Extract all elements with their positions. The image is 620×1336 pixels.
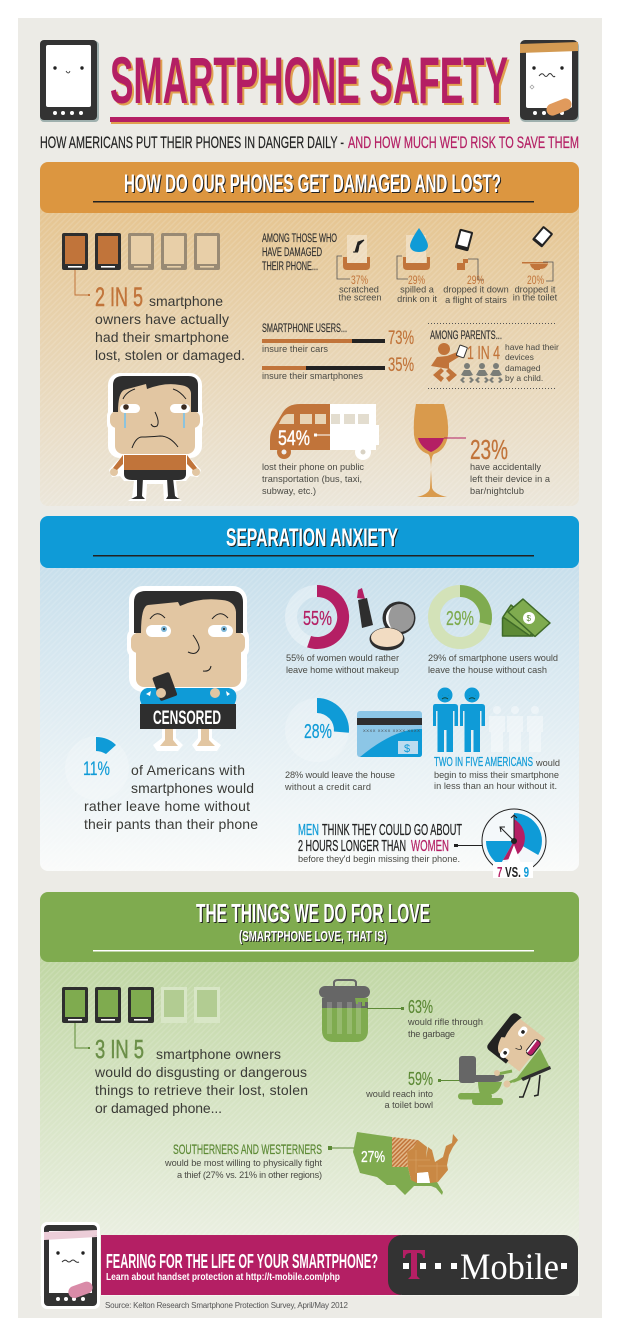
text: pants: of Americans with: [131, 762, 245, 778]
stat: dropped in the toilet: in the toilet: [513, 292, 558, 302]
text: two in five americans: TWO IN FIVE AMERICANS: [434, 755, 533, 769]
clock chart: 7 vs 9: 7 VS. 9: [497, 864, 529, 881]
icon: wine glass 23%: [414, 404, 508, 497]
icon: footer bandaged phone: [41, 1222, 100, 1309]
text: 2 in 5: 2 IN 5: [95, 282, 143, 312]
text: left at bar: bar/nightclub: [470, 486, 524, 496]
bar chart: insurance: SMARTPHONE USERS...: [262, 321, 347, 335]
icon: wine glass 23%: 23%: [470, 434, 508, 465]
stat: spilled a drink: 29%: [408, 273, 425, 287]
text: two in five americans: would: [535, 758, 560, 768]
donut chart: 28%: 28%: [304, 721, 332, 743]
text: among those who damaged: THEIR PHONE...: [262, 261, 318, 273]
text: pants: their pants than their phone: [84, 816, 258, 832]
section heading: separation anxiety: [40, 516, 579, 568]
donut chart: 28%: [285, 698, 349, 762]
stat: dropped down stairs: dropped it down: [443, 284, 509, 294]
text: credit card: 28% would leave the house: [285, 770, 395, 780]
text: 3 in 5: [94, 1034, 308, 1116]
text: 63% garbage: 63%: [408, 997, 433, 1017]
pie chart: 11%: 11%: [83, 759, 110, 780]
text: makeup: [286, 653, 399, 675]
pie chart: 11%: [65, 736, 129, 800]
text: 2 in 5: lost, stolen or damaged.: [95, 347, 245, 363]
text: men vs women: [298, 822, 482, 864]
text: pants: [84, 762, 258, 832]
icon: bus 54%: [270, 404, 379, 460]
text: southerners and westerners: [164, 1141, 354, 1180]
panel: separation anxiety: [40, 516, 579, 881]
stat: dropped in the toilet: 20%: [527, 273, 544, 287]
donut chart: 55%: [291, 585, 349, 649]
text: 59% toilet: would reach into: [365, 1089, 433, 1099]
map: united states: 27%: [361, 1149, 385, 1166]
icon: cash: $: [526, 614, 532, 623]
text: left at bar: have accidentally: [470, 462, 541, 472]
stat: dropped in the toilet: dropped it: [515, 284, 556, 294]
logo: t-mobile: Mobile: [460, 1247, 559, 1288]
text: southerners and westerners: a thief (27% vs. 21% in other regions): [177, 1170, 322, 1180]
text: public transportation: lost their phone on public: [262, 462, 364, 472]
icons: two in five people: [433, 688, 543, 752]
stat: scratched the screen: [337, 235, 381, 302]
icon: cash: [502, 599, 550, 636]
text: 3 in 5: things to retrieve their lost, stolen: [95, 1082, 308, 1098]
text: 63% garbage: would rifle through: [407, 1017, 483, 1027]
stat: dropped down stairs: a flight of stairs: [445, 295, 507, 305]
text: left at bar: left their device in a: [470, 474, 551, 484]
bar chart: insurance: insure their cars: [262, 344, 328, 354]
icons: 3 in 5 phones: [62, 987, 220, 1049]
callout: among parents: AMONG PARENTS...: [430, 328, 502, 342]
source note: Source: Kelton Research Smartphone Protection Survey, April/May 2012: [105, 1301, 349, 1310]
character: man reaching into toilet: [486, 1011, 551, 1097]
section heading: love: (SMARTPHONE LOVE, THAT IS): [239, 928, 387, 945]
censored bar: [140, 704, 236, 729]
bar chart: insurance: [262, 321, 414, 381]
text: among those who damaged: [262, 233, 337, 273]
section heading: separation anxiety: SEPARATION ANXIETY: [227, 525, 399, 553]
character: crying man: [107, 373, 203, 501]
icon: bus 54%: 54%: [278, 427, 310, 450]
text: 2 in 5: [95, 282, 245, 363]
stat: dropped down stairs: [443, 229, 509, 305]
text: pants: rather leave home without: [84, 798, 250, 814]
text: men vs women: before they'd begin missing their phone.: [298, 854, 460, 864]
text: southerners and westerners: would be most willing to physically fight: [164, 1158, 322, 1168]
text: two in five americans: begin to miss their smartphone: [434, 770, 559, 780]
stat: scratched the screen: 37%: [351, 273, 368, 287]
text: credit card: without a credit card: [284, 782, 371, 792]
text: men vs women: 2 HOURS LONGER THAN: [298, 838, 406, 855]
text: 2 in 5: owners have actually: [95, 311, 229, 327]
clock chart: 7 vs 9: [482, 809, 546, 881]
text: 2 in 5: had their smartphone: [95, 329, 229, 345]
text: 63% garbage: [407, 997, 483, 1039]
section heading: separation anxiety: SEPARATION ANXIETY: [226, 524, 398, 552]
text: 3 in 5: smartphone owners: [156, 1046, 281, 1062]
callout: among parents: 1 IN 4: [467, 343, 500, 363]
text: makeup: leave home without makeup: [286, 665, 399, 675]
section heading: damaged: [40, 162, 579, 213]
icon: happy phone: [40, 40, 99, 122]
bar chart: insurance: 35%: [388, 355, 414, 376]
censored bar: CENSORED: [153, 708, 221, 729]
text: southerners and westerners: SOUTHERNERS AND WESTERNERS: [173, 1141, 322, 1157]
donut chart: 55%: 55%: [303, 608, 332, 630]
donut chart: 29%: [434, 585, 492, 643]
text: cash: leave the house without cash: [428, 665, 547, 675]
bar chart: insurance: 73%: [388, 328, 414, 349]
text: two in five americans: [434, 755, 560, 791]
text: credit card: [284, 770, 395, 792]
text: men vs women: THINK THEY COULD GO ABOUT: [322, 822, 462, 839]
stat: spilled a drink: spilled a: [400, 284, 435, 294]
stat: scratched the screen: scratched: [339, 284, 379, 294]
subtitle: HOW AMERICANS PUT THEIR PHONES IN DANGER DAILY -: [40, 133, 344, 152]
text: 3 in 5: or damaged phone...: [95, 1100, 222, 1116]
section heading: love: (SMARTPHONE LOVE, THAT IS): [240, 929, 388, 946]
text: 59% toilet: a toilet bowl: [384, 1100, 433, 1110]
text: cash: 29% of smartphone users would: [428, 653, 558, 663]
text: pants: smartphones would: [131, 780, 254, 796]
footer banner: FEARING FOR THE LIFE OF YOUR SMARTPHONE?: [106, 1251, 378, 1273]
callout: among parents: have had their: [505, 342, 559, 352]
stat: dropped in the toilet: [513, 226, 558, 302]
text: public transportation: [262, 462, 364, 496]
icon: credit card: XXXX XXXX XXXX XXXX: [363, 728, 420, 733]
icons: 2 in 5 phones: [62, 233, 220, 296]
text: among those who damaged: AMONG THOSE WHO: [262, 233, 337, 245]
text: makeup: 55% of women would rather: [286, 653, 399, 663]
text: two in five americans: in less than an hour without it.: [434, 781, 557, 791]
icon: credit card: $: [404, 743, 410, 755]
footer banner: Learn about handset protection at http://t-mobile.com/php: [106, 1272, 340, 1283]
text: public transportation: subway, etc.): [262, 486, 316, 496]
icon: lipstick and compact: [357, 588, 416, 650]
bar chart: insurance: insure their smartphones: [262, 371, 363, 381]
icon: toilet: [458, 1056, 504, 1105]
text: 59% toilet: 59%: [408, 1069, 433, 1089]
callout: among parents: damaged: [505, 363, 541, 373]
section heading: love: THE THINGS WE DO FOR LOVE: [196, 898, 430, 928]
donut chart: 29%: 29%: [446, 608, 474, 630]
text: cash: [428, 653, 558, 675]
text: 3 in 5: 3 IN 5: [95, 1034, 144, 1064]
text: 3 in 5: would do disgusting or dangerous: [94, 1064, 307, 1080]
callout: among parents: devices: [505, 352, 534, 362]
panel: things we do for love: [40, 892, 579, 1296]
character: censored man: [127, 586, 249, 751]
text: 59% toilet: [365, 1069, 460, 1110]
stat: spilled a drink: [397, 228, 437, 304]
stat: scratched the screen: the screen: [339, 292, 381, 302]
section heading: love: THE THINGS WE DO FOR LOVE: [197, 899, 431, 929]
text: 63% garbage: the garbage: [408, 1029, 455, 1039]
text: men vs women: WOMEN: [411, 838, 449, 855]
text: left at bar: [470, 462, 551, 496]
text: 2 in 5: smartphone: [149, 293, 223, 309]
footer banner: [101, 1235, 401, 1295]
callout: among parents: by a child.: [505, 373, 543, 383]
callout: among parents: [428, 324, 559, 388]
map: united states: [353, 1132, 458, 1195]
icon: bandaged phone: [520, 40, 579, 122]
panel: damaged and lost: [40, 162, 579, 506]
icon: trash can: [319, 980, 404, 1042]
icon: credit card: [357, 711, 422, 757]
section heading: love: [40, 892, 579, 962]
text: public transportation: transportation (bus, taxi,: [262, 474, 362, 484]
logo: t-mobile: [388, 1235, 578, 1295]
stat: spilled a drink: drink on it: [397, 294, 437, 304]
text: men vs women: MEN: [298, 822, 319, 839]
text: among those who damaged: HAVE DAMAGED: [262, 247, 322, 259]
stat: dropped down stairs: 29%: [467, 273, 484, 287]
